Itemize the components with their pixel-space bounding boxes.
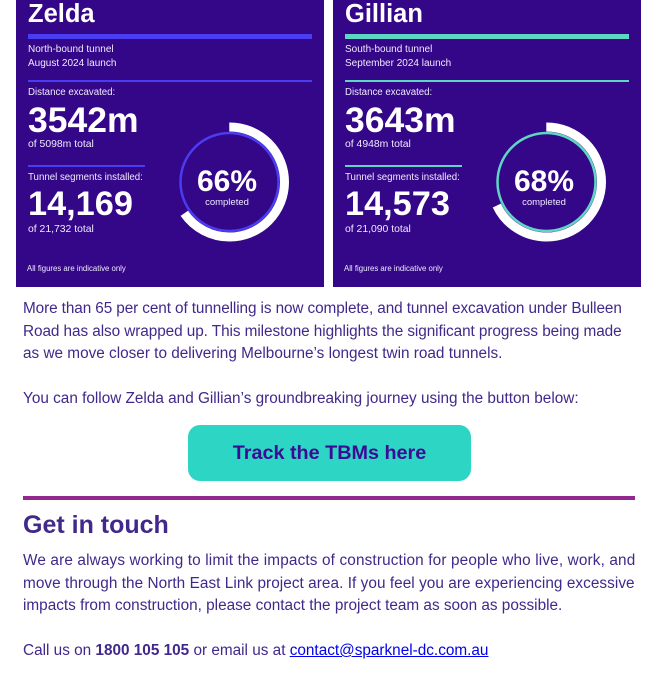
intro paragraph bbox=[23, 300, 622, 362]
intro paragraph: More than 65 per cent of tunnelling is now complete, and tunnel excavation under Bulleen bbox=[23, 300, 622, 317]
segments value: 14,169 bbox=[28, 185, 133, 223]
progress ring 66%: completed bbox=[205, 197, 249, 208]
heading: Get in touch: Get in touch bbox=[23, 511, 169, 539]
tunnel description: North-bound tunnel bbox=[28, 44, 114, 55]
distance value: 3643m bbox=[345, 100, 456, 140]
segments total: of 21,732 total bbox=[28, 224, 94, 235]
button: Track the TBMs here: Track the TBMs here bbox=[233, 442, 426, 464]
contact paragraph: impacts from construction, please contact the project team as soon as possible. bbox=[23, 597, 562, 614]
panel: Zelda bbox=[16, 0, 324, 287]
progress ring 66%: 66% bbox=[197, 165, 257, 198]
distance total: of 4948m total bbox=[345, 139, 411, 150]
short divider bbox=[28, 165, 145, 167]
button: Track the TBMs here bbox=[188, 425, 471, 481]
short divider bbox=[345, 165, 462, 167]
distance total: of 5098m total bbox=[28, 139, 94, 150]
launch date: September 2024 launch bbox=[345, 58, 451, 69]
contact paragraph bbox=[23, 552, 635, 614]
progress ring 68%: completed bbox=[522, 197, 566, 208]
accent bar bbox=[28, 34, 312, 39]
follow text: You can follow Zelda and Gillian’s groundbreaking journey using the button below: bbox=[23, 390, 579, 407]
panel: Gillian bbox=[333, 0, 641, 287]
contact details: Call us on 1800 105 105 or email us at contact@sparknel-dc.com.au bbox=[23, 642, 488, 659]
section rule bbox=[23, 496, 635, 500]
heading: Gillian: Gillian bbox=[345, 0, 423, 28]
intro paragraph: as we move closer to delivering Melbourne’s longest twin road tunnels. bbox=[23, 345, 502, 362]
progress ring 66% bbox=[179, 122, 289, 242]
divider bbox=[28, 80, 312, 82]
segments value: 14,573 bbox=[345, 185, 450, 223]
launch date: August 2024 launch bbox=[28, 58, 116, 69]
distance label: Distance excavated: bbox=[28, 87, 115, 98]
segments label: Tunnel segments installed: bbox=[28, 172, 143, 183]
segments label: Tunnel segments installed: bbox=[345, 172, 460, 183]
segments total: of 21,090 total bbox=[345, 224, 411, 235]
progress ring 68%: 68% bbox=[514, 165, 574, 198]
disclaimer: All figures are indicative only bbox=[344, 264, 443, 273]
disclaimer: All figures are indicative only bbox=[27, 264, 126, 273]
divider bbox=[345, 80, 629, 82]
contact paragraph: We are always working to limit the impacts of construction for people who live, work, and bbox=[23, 552, 635, 569]
distance value: 3542m bbox=[28, 100, 139, 140]
tunnel description: South-bound tunnel bbox=[345, 44, 432, 55]
progress ring 68% bbox=[492, 122, 606, 242]
heading: Zelda: Zelda bbox=[28, 0, 95, 28]
distance label: Distance excavated: bbox=[345, 87, 432, 98]
contact paragraph: move through the North East Link project area. If you feel you are experiencing excessive bbox=[23, 574, 635, 592]
intro paragraph: Road has also wrapped up. This milestone highlights the significant progress being made bbox=[23, 322, 622, 340]
accent bar bbox=[345, 34, 629, 39]
